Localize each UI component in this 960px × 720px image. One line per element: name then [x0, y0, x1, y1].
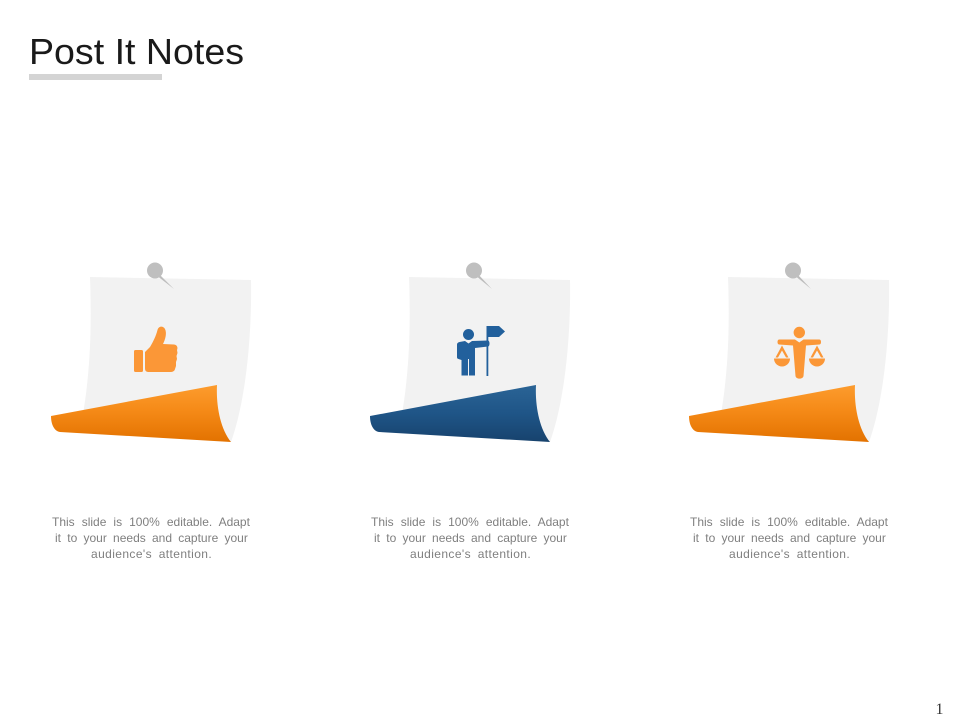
note 2 text: it to your needs and capture your [374, 531, 567, 545]
note 2 curled flap [370, 385, 550, 442]
note 1 text [52, 515, 251, 561]
panel: note 2 [370, 262, 570, 442]
note 1 text: it to your needs and capture your [55, 531, 248, 545]
note 2 text: audience's attention. [410, 547, 531, 561]
note 1 pin [147, 262, 174, 289]
note 3 paper [720, 277, 889, 442]
icon: thumbs up [134, 327, 178, 372]
panel: note 3 [689, 262, 889, 442]
note 2 text [371, 515, 570, 561]
note 1 paper [82, 277, 251, 442]
panel: note 1 [51, 262, 251, 442]
title underline [29, 74, 162, 80]
note 3 text [690, 515, 889, 561]
note 2 pin [466, 262, 492, 289]
note 1 text: This slide is 100% editable. Adapt [52, 515, 251, 529]
note 3 text: it to your needs and capture your [693, 531, 886, 545]
note 3 curled flap [689, 385, 869, 442]
icon: person with flag [457, 326, 505, 376]
note 2 paper [401, 277, 570, 442]
note 3 text: audience's attention. [729, 547, 850, 561]
icon: person balance scale [774, 327, 825, 379]
page number: 1 [936, 701, 944, 718]
note 3 text: This slide is 100% editable. Adapt [690, 515, 889, 529]
note 1 text: audience's attention. [91, 547, 212, 561]
title: Post It Notes [29, 31, 244, 72]
note 2 text: This slide is 100% editable. Adapt [371, 515, 570, 529]
note 1 curled flap [51, 385, 231, 442]
note 3 pin [785, 262, 811, 289]
